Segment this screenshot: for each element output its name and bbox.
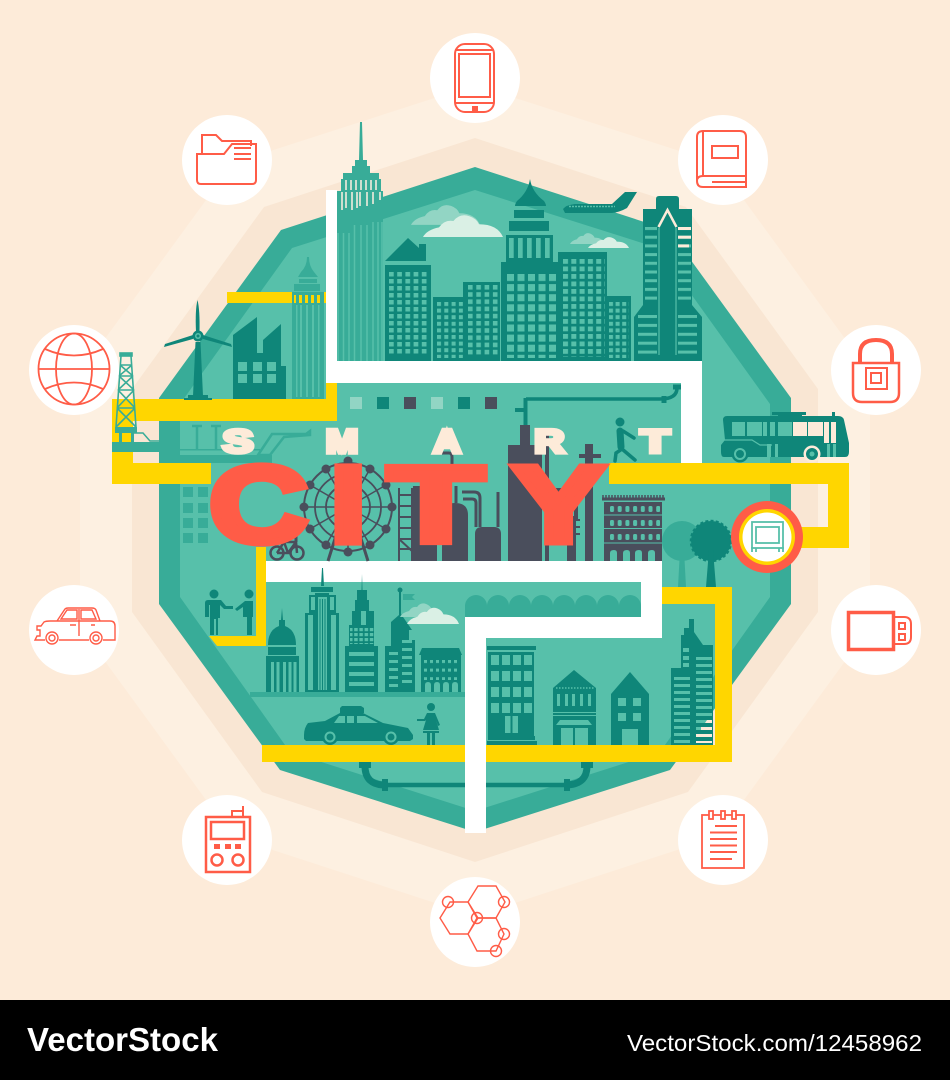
icon: globe [29, 325, 119, 415]
white path over pipe [465, 762, 486, 833]
cloud lower [400, 603, 459, 624]
Empire style tower [337, 122, 383, 361]
office building [487, 646, 537, 745]
icon: car [29, 585, 119, 675]
shop house [553, 670, 596, 745]
icon: radio [182, 795, 272, 885]
lower skyline [266, 568, 462, 692]
wind turbine [164, 300, 232, 400]
right lower skyscraper [671, 619, 713, 745]
colored squares row [350, 397, 497, 409]
small house [611, 672, 649, 745]
pipe lower [359, 765, 593, 791]
icon: notebook [678, 795, 768, 885]
footer bar [0, 1000, 950, 1080]
word CITY [209, 443, 605, 566]
word CITY: Y [512, 444, 605, 566]
word SMART: R [534, 424, 564, 459]
arch row [465, 595, 641, 617]
icon: folder [182, 115, 272, 205]
pedestrian [615, 418, 635, 461]
faint industry and window grid, left [159, 425, 310, 543]
word SMART: T [640, 423, 670, 460]
left pale tower [292, 257, 324, 399]
bicycle [270, 533, 304, 560]
clouds upper [411, 205, 629, 248]
top skyline buildings [385, 179, 631, 361]
oil rig platform [112, 427, 160, 452]
factory [233, 317, 286, 399]
word CITY: T [387, 444, 485, 566]
refinery [399, 425, 601, 561]
icon: book [678, 115, 768, 205]
icon: lock [831, 325, 921, 415]
city octagon base [159, 167, 791, 832]
word CITY: I [330, 443, 366, 566]
pipe upper [515, 387, 681, 430]
word SMART [222, 423, 670, 460]
icon: phone [430, 33, 520, 123]
slate arcade building [602, 495, 665, 561]
word SMART: M [326, 424, 358, 460]
highlighted node [731, 501, 803, 573]
footer id: VectorStock.com/12458962 [627, 1030, 922, 1056]
white network paths [266, 190, 702, 833]
yellow network paths [112, 292, 849, 762]
handshake people [205, 590, 254, 635]
trees [662, 521, 731, 587]
taxi [304, 706, 413, 745]
oil derrick [116, 353, 136, 427]
ferris wheel [300, 456, 396, 561]
icon: usb drive [831, 585, 921, 675]
airplane [563, 192, 637, 213]
bus [721, 412, 849, 462]
icon: molecule hexagons [430, 877, 520, 967]
woman [417, 703, 440, 745]
word CITY: C [209, 444, 308, 566]
ground strip [250, 692, 465, 697]
octagonal halo rings [80, 85, 870, 916]
footer brand: VectorStock [27, 1021, 219, 1058]
word SMART: A [434, 424, 461, 460]
tall right skyscraper [634, 196, 702, 361]
word SMART: S [222, 424, 253, 460]
